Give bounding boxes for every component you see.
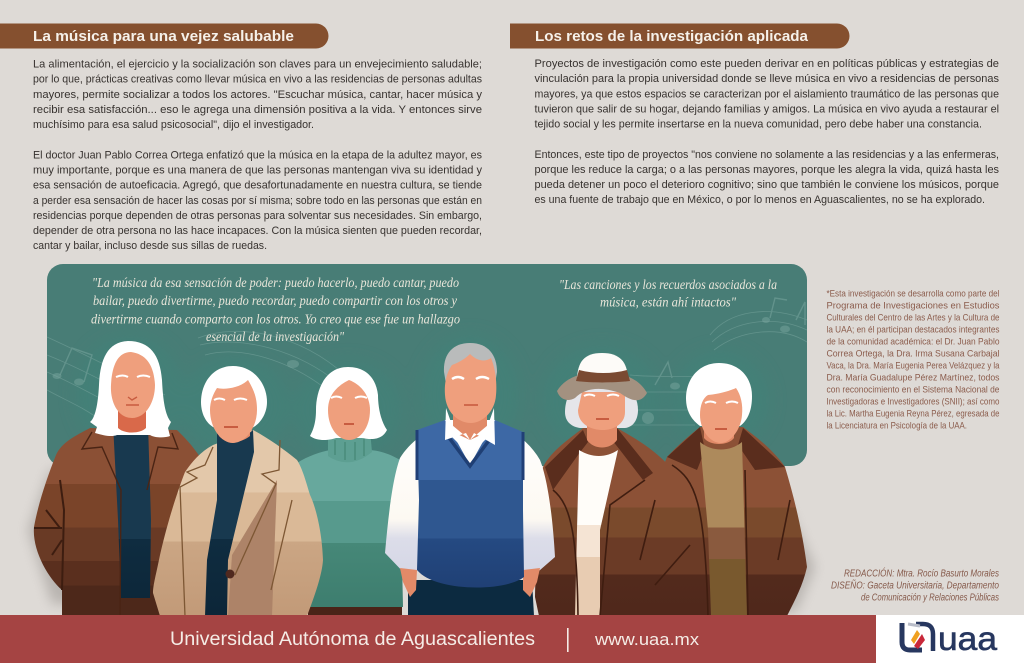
body text right, paragraph 1: vinculación para la propia universidad donde se lleve música en vivo a residencias de personas (534, 73, 999, 85)
side note: con reconocimiento en el Sistema Nacional de (826, 384, 1000, 396)
person 6: woman with brown jacket and ochre sweater (640, 363, 807, 616)
body text right, paragraph 1: tejido social y les permite insertarse en la nueva comunidad, pero debe haber una constancia. (534, 118, 982, 130)
person 3: woman with teal turtleneck (297, 367, 403, 616)
logo UAA (876, 615, 1024, 663)
body text left, paragraph 1: muchísimo para esa salud psicosocial", dijo el investigador. (33, 119, 314, 131)
side note: Correa Ortega, la Dra. Irma Susana Carbajal (826, 348, 1000, 360)
quote 1: bailar, puedo divertirme, puedo recordar, puedo compartir con los otros y (93, 294, 458, 309)
body text right, paragraph 2: Entonces, este tipo de proyectos "nos conviene no solamente a las residencias y a las enfermeras, (534, 149, 999, 161)
body text right, paragraph 2: porque les reduce la carga; o a las personas mayores, porque les alegra la vida, quizá hasta les (534, 164, 999, 176)
heading bar right: Los retos de la investigación aplicada (535, 28, 809, 45)
footer text: website: www.uaa.mx (594, 631, 700, 649)
body text left, paragraph 2: El doctor Juan Pablo Correa Ortega enfatizó que la música en la etapa de la adultez mayor, es (33, 150, 482, 162)
body text left, paragraph 1: por lo que, prácticas creativas como llevar música en vivo a las residencias de personas adultas (33, 74, 482, 86)
heading bar left (0, 24, 328, 48)
body text right, paragraph 1: mayores, ya que estos espacios se caracterizan por el aislamiento traumático de las personas que (534, 88, 999, 100)
side note: Dra. María Guadalupe Pérez Martínez, todos (826, 372, 1000, 384)
footer bar (0, 615, 876, 663)
heading bar right (510, 24, 849, 48)
quote 1: divertirme cuando comparto con los otros. Yo creo que ese fue un hallazgo (91, 312, 460, 328)
quote 2 (559, 278, 777, 310)
person 2: woman with beige coat and navy turtleneck (153, 366, 323, 616)
footer text: university: Universidad Autónoma de Aguascalientes (170, 629, 535, 650)
body text left, paragraph 2: residencias porque dependen de otras personas para solventar sus necesidades. Sin embargo, (33, 210, 482, 222)
person 4: man with grey hair, blue vest and white shirt (385, 343, 555, 616)
body text right, paragraph 1: Proyectos de investigación como este pueden derivar en en políticas públicas y estrategias de (534, 58, 999, 70)
body text left, paragraph 2: a perder esa sensación de hacer las cosas por sí misma; sobre todo en las personas que están en (33, 195, 482, 207)
panel: La música para una vejez salubable (0, 24, 482, 252)
side note (826, 288, 1000, 432)
quote 2: "Las canciones y los recuerdos asociados a la (559, 278, 777, 293)
person 1: man with long white hair and brown jacket (34, 341, 200, 616)
side note: la UAA; en él participan destacados integrantes (826, 324, 1000, 336)
body text left, paragraph 2: cantar y bailar, incluso desde sus sillas de ruedas. (33, 240, 267, 252)
head glow (75, 335, 770, 460)
body text right, paragraph 1: tuvieron que salir de su hogar, dejando familias y amigos. La música en vivo ayuda a restaurar el (534, 104, 999, 116)
shadow behind people (28, 470, 815, 612)
quote 1 (91, 276, 460, 345)
illustration: group of older adults (34, 341, 807, 616)
music notes decoration (47, 298, 807, 425)
credits (831, 566, 999, 604)
quote 2: música, están ahí intactos" (600, 296, 736, 310)
body text left, paragraph 1 (33, 58, 482, 131)
body text left, paragraph 1: La alimentación, el ejercicio y la socialización son claves para un envejecimiento saludable; (33, 58, 482, 70)
body text left, paragraph 2: esa sensación de autoeficacia. Agregó, que desafortunadamente en nuestra cultura, se tiende (33, 180, 482, 192)
body text left, paragraph 2 (33, 150, 482, 252)
heading bar left: La música para una vejez salubable (33, 28, 294, 45)
body text right, paragraph 2: es una fuente de trabajo que en México, o por lo menos en Aguascalientes, no se ha explorado. (534, 194, 985, 206)
side note: Programa de Investigaciones en Estudios (826, 300, 1000, 312)
side note: de la comunidad académica: el Dr. Juan Pablo (826, 336, 1000, 348)
body text right, paragraph 2 (534, 149, 999, 206)
body text left, paragraph 2: depender de otra persona no las hace incapaces. Con la música sienten que pueden recordar, (33, 225, 482, 237)
body text left, paragraph 1: mayores, permite socializar a todos los actores. "Escuchar música, cantar, hacer música y (33, 89, 482, 101)
body text right, paragraph 2: pueda detener un poco el deterioro cognitivo; sino que también le conviene los músicos, porque (534, 179, 999, 191)
person 5: woman with white hat and brown coat (535, 353, 695, 616)
panel: Los retos de la investigación aplicada (510, 24, 999, 206)
side note: la Licenciatura en Psicología de la UAA. (826, 420, 967, 432)
footer divider (567, 628, 569, 652)
body text right, paragraph 1 (534, 58, 999, 130)
panel: green quote background (47, 264, 807, 466)
logo UAA: uaa (938, 620, 998, 657)
quote 1: esencial de la investigación" (206, 330, 344, 345)
body text left, paragraph 1: recibir esa satisfacción... eso le agrega una dimensión positiva a la vida. Y entonces sirve (33, 104, 482, 116)
body text left, paragraph 2: muy importante, porque es una manera de que las personas mantengan viva su identidad y (33, 164, 482, 176)
quote 1: "La música da esa sensación de poder: puedo hacerlo, puedo cantar, puedo (92, 276, 459, 291)
